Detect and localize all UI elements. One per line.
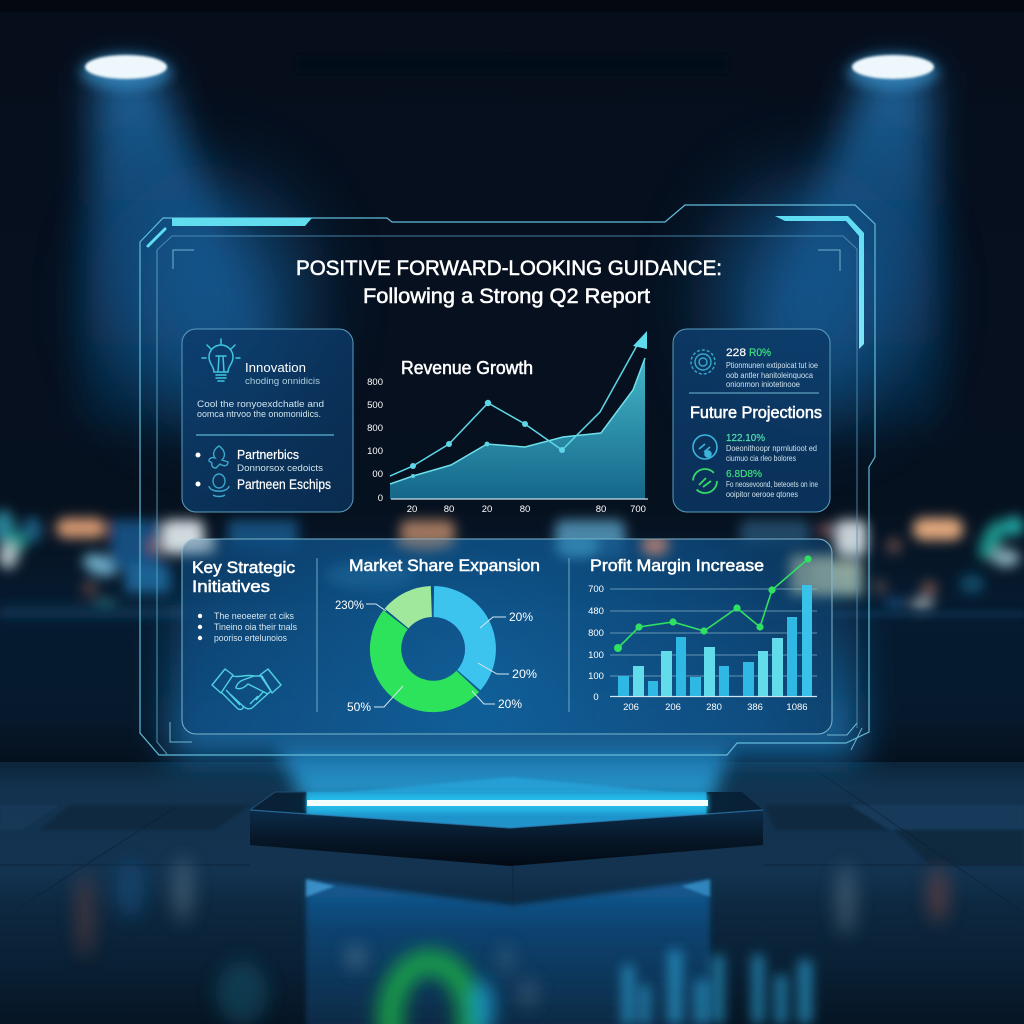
green trend line [614, 555, 812, 652]
list: partnerships: Donnorsox cedoicts [237, 463, 323, 474]
list: partnerships: Partneen Eschips [237, 477, 331, 492]
y labels: 480 [588, 606, 604, 617]
metric two: 122.10% [726, 432, 765, 444]
x labels [623, 702, 808, 713]
panel: lower metrics [175, 525, 845, 734]
y-axis labels: 500 [367, 400, 383, 411]
bullet list [198, 611, 297, 643]
line series [390, 340, 640, 476]
x labels: 206 [623, 702, 639, 713]
x-axis labels: 80 [596, 504, 606, 515]
x labels: 386 [747, 702, 763, 713]
metric one: R0% [749, 347, 771, 359]
spotlight lamps [80, 54, 939, 90]
title [296, 257, 722, 308]
pedestal [250, 792, 763, 866]
heading: future projections: Future Projections [690, 403, 822, 422]
heading: key strategic initiatives: Initiatives [192, 577, 270, 596]
icon: partnership one [209, 446, 228, 468]
floor [0, 762, 1024, 1024]
reflected side lights [76, 858, 948, 1024]
x-axis labels: 700 [630, 504, 646, 515]
y-axis labels: 800 [367, 377, 383, 388]
icon: handshake [212, 669, 281, 709]
y-axis labels: 800 [367, 423, 383, 434]
projected light beam from pedestal [170, 540, 860, 800]
section: key strategic initiatives [192, 558, 297, 709]
metric one: oob antler hanitoleinquoca [726, 371, 814, 380]
panel: future projections [673, 329, 830, 512]
x-axis labels: 20 [482, 504, 492, 515]
title: POSITIVE FORWARD-LOOKING GUIDANCE: [296, 257, 722, 280]
bullet list: Tineino oia their tnals [214, 622, 297, 632]
text: innovation: choding onnidicis [245, 376, 320, 387]
icon: circular arrows cyan [693, 435, 717, 459]
text: innovation [245, 360, 320, 387]
heading: profit margin increase: Profit Margin Increase [590, 556, 764, 575]
heading: revenue growth: Revenue Growth [401, 358, 533, 378]
chart: revenue growth [367, 331, 648, 515]
glowing light bar [307, 794, 708, 812]
metric one: onionmon iniotetinooe [726, 380, 801, 389]
text: innovation: Innovation [245, 360, 306, 375]
y labels: 0 [593, 692, 599, 703]
y labels: 700 [588, 584, 604, 595]
frame accent top-left [172, 218, 312, 226]
y labels: 100 [588, 671, 604, 682]
icon: gear target [691, 350, 715, 374]
metric one [726, 347, 818, 389]
donut labels and leaders: 20% [509, 610, 533, 624]
chart: profit margin [588, 555, 817, 713]
reflected bars [622, 950, 812, 1024]
holographic frame [140, 205, 875, 755]
x labels: 280 [706, 702, 722, 713]
donut labels and leaders: 230% [335, 598, 364, 612]
bars [618, 585, 812, 696]
text: description [197, 399, 324, 420]
reflected donut [390, 962, 494, 1024]
metric one: Ptionmunen extipoicat tut ioe [726, 361, 818, 370]
icon: partnership two [209, 474, 229, 496]
donut segments [370, 586, 496, 712]
x labels: 206 [665, 702, 681, 713]
heading: key strategic initiatives [192, 558, 296, 596]
y-axis labels: 0 [378, 493, 383, 504]
blurred control-room bokeh lights [0, 510, 1024, 618]
y-axis labels [367, 377, 383, 504]
donut labels and leaders: 20% [512, 667, 537, 681]
y-axis labels: 100 [367, 446, 383, 457]
y labels: 800 [588, 628, 604, 639]
grid lines and axis [610, 589, 817, 676]
heading: market share expansion: Market Share Expansion [349, 556, 540, 575]
title: Following a Strong Q2 Report [363, 285, 650, 308]
x-axis labels: 80 [444, 504, 454, 515]
x-axis labels [407, 504, 646, 515]
metric three: 6.8D8% [726, 468, 762, 480]
metric three [726, 468, 818, 499]
area series [390, 358, 645, 499]
heading: key strategic initiatives: Key Strategic [192, 558, 296, 577]
donut labels and leaders [335, 598, 537, 714]
floor reflection [76, 858, 948, 1024]
panel: innovation and partnerships [182, 329, 353, 512]
y labels: 100 [588, 650, 604, 661]
metric one: 228 [726, 347, 746, 359]
frame accent slash [148, 229, 165, 246]
spotlight beams [80, 72, 945, 430]
donut labels and leaders: 50% [347, 700, 371, 714]
y-axis labels: 00 [372, 469, 383, 480]
x labels: 1086 [786, 702, 808, 713]
list: partnerships [196, 446, 331, 496]
metric three: Fo neosevoond, beteoets on ine [726, 480, 818, 489]
text: description: Cool the ronyoexdchatle and [197, 399, 324, 410]
list: partnerships: Partnerbics [237, 448, 299, 462]
bokeh visible through panel [182, 539, 832, 603]
text: description: oomca ntrvoo the onomonidics. [197, 409, 321, 420]
icon: circular arrows green [693, 469, 717, 493]
arrow head [633, 331, 647, 349]
chart: market share donut [335, 556, 540, 714]
metric three: ooipitor oerooe qtones [726, 490, 798, 499]
metric two: Doeonithoopr nprnlutioot ed [726, 444, 817, 453]
frame accent top-right [775, 216, 864, 349]
y labels [588, 584, 604, 703]
x-axis labels: 80 [520, 504, 530, 515]
bullet list: The neoeeter ct ciks [214, 611, 294, 621]
x-axis labels: 20 [407, 504, 417, 515]
metric two: ciumuo cia rleo bolores [726, 454, 796, 463]
icon: light bulb [202, 339, 240, 381]
bullet list: pooriso ertelunoios [214, 633, 287, 643]
donut labels and leaders: 20% [498, 697, 522, 711]
metric two [726, 432, 817, 463]
